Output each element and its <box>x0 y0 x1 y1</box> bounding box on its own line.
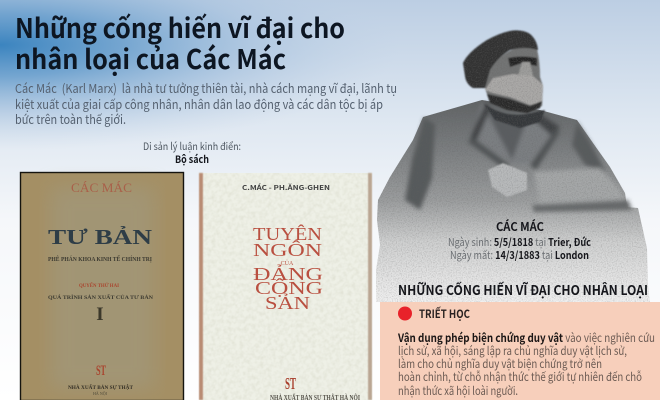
book: Tuyên ngôn của Đảng Cộng sản: CỘNG <box>255 278 323 298</box>
panel text <box>397 330 655 399</box>
book: Tư bản: CÁC MÁC <box>71 181 132 195</box>
panel text: nhận thức xã hội loài người. <box>398 383 518 399</box>
books caption: Bộ sách <box>175 151 209 166</box>
panel text: làm cho chủ nghĩa duy vật biện chứng trở nên <box>398 356 602 372</box>
book: Tuyên ngôn của Đảng Cộng sản: CỦA <box>281 259 294 267</box>
book: Tư bản: TƯ BẢN <box>48 225 152 249</box>
statue hand <box>488 163 527 197</box>
intro text: Các Mác (Karl Marx) là nhà tư tưởng thiên tài, nhà cách mạng vĩ đại, lãnh tụ <box>15 79 397 97</box>
panel: philosophy <box>380 302 660 400</box>
panel text: lịch sử, xã hội, sáng lập ra chủ nghĩa duy vật lịch sử, <box>398 343 627 359</box>
title line two: nhân loại của Các Mác <box>15 38 286 77</box>
book: Tuyên ngôn của Đảng Cộng sản: SẢN <box>265 293 310 313</box>
profile: Các Mác: CÁC MÁC <box>496 218 544 235</box>
books caption <box>143 138 241 166</box>
books caption: Di sản lý luận kinh điển: <box>143 138 241 153</box>
profile: Các Mác: Ngày mất: 14/3/1883 tại London <box>450 248 589 263</box>
book: Tuyên ngôn của Đảng Cộng sản: C.MÁC - PH.ĂNG-GHEN <box>242 182 330 192</box>
book: Tuyên ngôn của Đảng Cộng sản: NGÔN <box>253 240 322 260</box>
title: Những cống hiến vĩ đại cho <box>15 7 345 46</box>
book: Tuyên ngôn của Đảng Cộng sản <box>199 173 372 400</box>
book: Tư bản: QUYỂN THỨ HAI <box>79 281 119 289</box>
panel heading: TRIẾT HỌC <box>419 306 470 322</box>
coat details <box>405 102 632 212</box>
book: Tuyên ngôn của Đảng Cộng sản: ĐẢNG <box>253 264 323 284</box>
book: Tư bản <box>20 172 184 400</box>
icon: red dot <box>398 306 412 320</box>
book: Tư bản: NHÀ XUẤT BẢN SỰ THẬT <box>68 385 134 391</box>
book: Tư bản: PHÊ PHÁN KHOA KINH TẾ CHÍNH TRỊ <box>48 255 152 263</box>
statue head and beard <box>463 30 545 128</box>
book: Tuyên ngôn của Đảng Cộng sản: TUYÊN <box>253 224 322 244</box>
profile: Các Mác: Ngày sinh: 5/5/1818 tại Trier, Đức <box>448 235 591 250</box>
intro text <box>15 79 397 128</box>
statue of Karl Marx <box>376 30 650 302</box>
book: Tư bản: QUÁ TRÌNH SẢN XUẤT CỦA TƯ BẢN <box>48 293 153 301</box>
intro text: kiệt xuất của giai cấp công nhân, nhân dân lao động và các dân tộc bị áp <box>15 95 383 113</box>
book: Tư bản: HÀ NỘI <box>93 391 108 396</box>
book: Tuyên ngôn của Đảng Cộng sản: ST <box>285 374 296 393</box>
book: Tư bản: I <box>96 304 104 325</box>
intro text: bức trên toàn thế giới. <box>15 110 126 128</box>
profile: Các Mác <box>448 218 591 263</box>
book: Tư bản: ST <box>96 363 106 379</box>
